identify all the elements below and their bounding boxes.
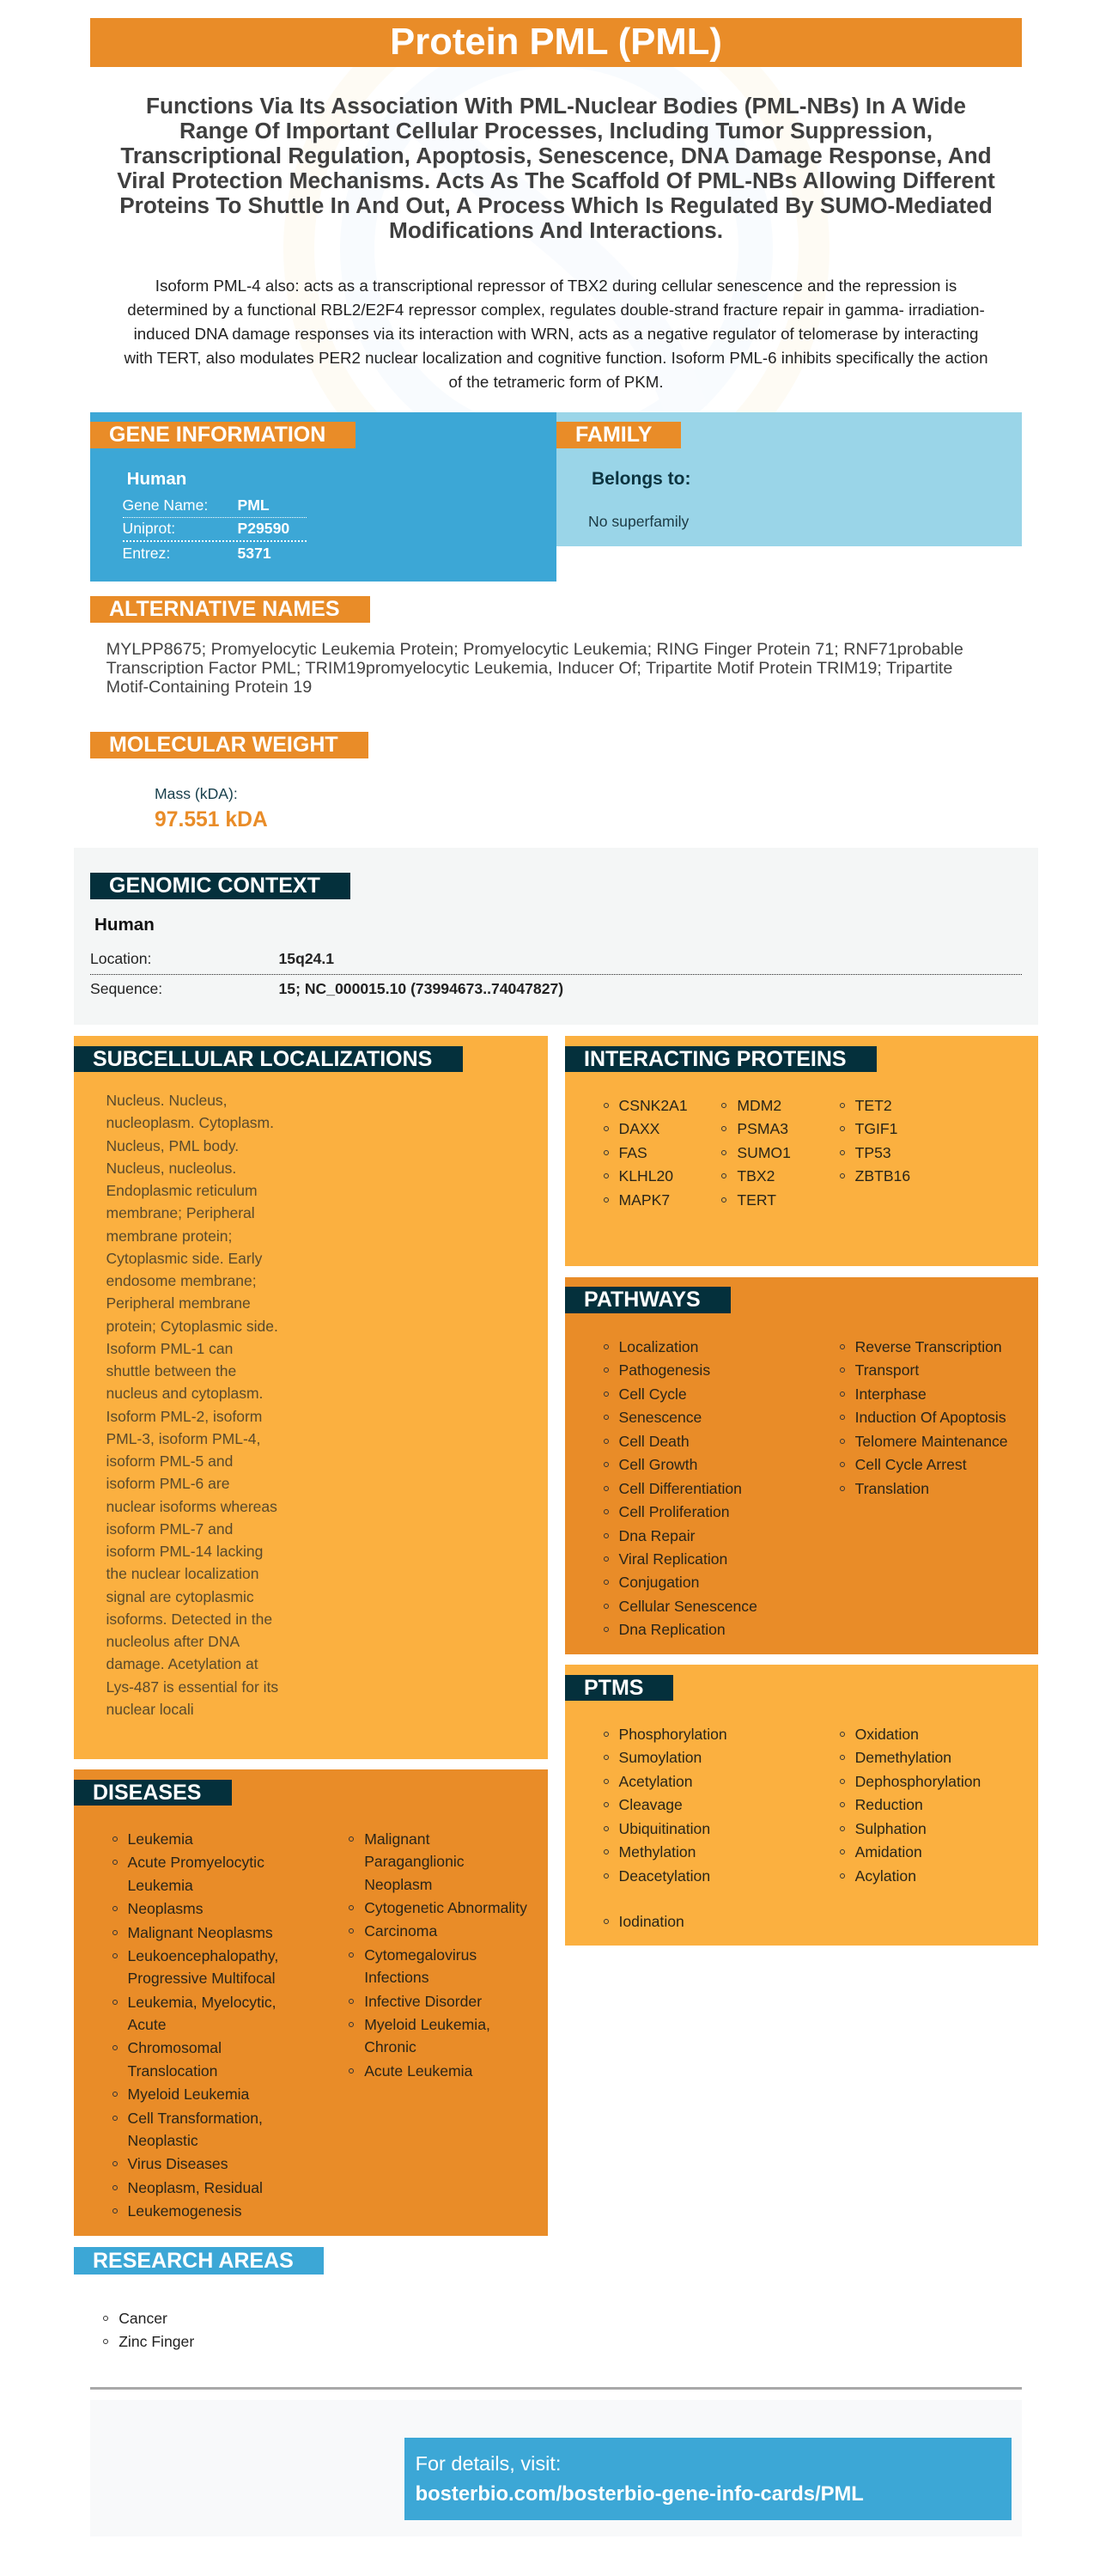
pathway list column 1: Cell Proliferation: [618, 1503, 730, 1520]
localization text: Peripheral membrane: [106, 1294, 251, 1312]
panel: alternative names: [90, 596, 963, 697]
protein list column 1: KLHL20: [618, 1167, 673, 1184]
pathway list column 1: Dna Replication: [618, 1621, 726, 1638]
protein list column 1: MAPK7: [618, 1191, 670, 1209]
localization text: Isoform PML-1 can: [106, 1340, 233, 1357]
protein list column 1: CSNK2A1: [618, 1097, 688, 1114]
sequence row: 15; NC_000015.10 (73994673..74047827): [278, 980, 563, 997]
heading: function summary: Functions Via Its Association With PML-Nuclear Bodies (PML-NBs) In A Wide: [146, 93, 966, 119]
species label: Human: [94, 915, 155, 935]
heading: interacting proteins: INTERACTING PROTEINS: [584, 1047, 847, 1071]
disease list column 2: Acute Leukemia: [364, 2062, 472, 2080]
entrez row: 5371: [237, 545, 271, 562]
PTM list column 2: Oxidation: [855, 1726, 919, 1743]
text block: isoform description: with TERT, also modulates PER2 nuclear localization and cognitive function. Isoform PML-6 inhibits specifically the action: [124, 349, 988, 367]
text block: isoform description: induced DNA damage responses via its interaction with WRN, acts as a negative regulator of telomerase by interacting: [134, 325, 978, 343]
pathway list column 1: [604, 1338, 757, 1638]
protein list column 3: TP53: [855, 1144, 891, 1161]
pathway list column 1: Cell Cycle: [618, 1385, 687, 1403]
pathway list column 2: Translation: [855, 1480, 929, 1497]
title: [90, 18, 1022, 67]
heading: function summary: Viral Protection Mechanisms. Acts As The Scaffold Of PML-NBs Allowing Different: [117, 167, 995, 192]
panel: pathways: [565, 1277, 1038, 1654]
disease list column 2: Paraganglionic: [364, 1853, 465, 1870]
alternative names text: Motif-Containing Protein 19: [106, 678, 312, 697]
localization text: isoform PML-6 are: [106, 1475, 229, 1492]
localization text: isoforms. Detected in the: [106, 1611, 272, 1628]
uniprot row: Uniprot:: [122, 520, 175, 537]
panel: research areas: [74, 2247, 324, 2350]
heading: function summary: Range Of Important Cellular Processes, Including Tumor Suppression,: [179, 117, 933, 143]
PTM list column 1: Deacetylation: [618, 1867, 710, 1885]
disease list column 1: Chromosomal: [127, 2039, 222, 2056]
heading: pathways: [565, 1287, 731, 1313]
pathway list column 2: Telomere Maintenance: [855, 1433, 1008, 1450]
heading: PTMs: PTMS: [584, 1676, 643, 1700]
localization text: Nucleus, PML body.: [106, 1137, 239, 1154]
PTM list column 1: Acetylation: [618, 1773, 693, 1790]
localization text: Cytoplasmic side. Early: [106, 1250, 262, 1267]
PTM list column 2: Sulphation: [855, 1820, 927, 1837]
disease list column 2: Malignant: [364, 1830, 429, 1848]
protein list column 3: TET2: [855, 1097, 892, 1114]
sequence row: Sequence:: [90, 980, 162, 997]
disease list column 1: Neoplastic: [127, 2132, 198, 2149]
disease list column 1: Leukemogenesis: [127, 2202, 242, 2220]
alternative names text: MYLPP8675; Promyelocytic Leukemia Protein; Promyelocytic Leukemia; RING Finger Protein 71; RNF71probable: [106, 640, 963, 659]
protein list column 1: DAXX: [618, 1120, 659, 1137]
pathway list column 1: Dna Repair: [618, 1527, 696, 1544]
heading: function summary: [117, 93, 995, 242]
PTM list column 2: Amidation: [855, 1843, 922, 1860]
heading: function summary: Modifications And Interactions.: [389, 216, 723, 242]
pathway list column 1: Cell Growth: [618, 1456, 697, 1473]
PTM list column 2: [840, 1726, 981, 1885]
location row: 15q24.1: [278, 950, 334, 967]
localization text: Endoplasmic reticulum: [106, 1182, 258, 1199]
heading: molecular weight: MOLECULAR WEIGHT: [109, 733, 338, 757]
PTM list column 1: Methylation: [618, 1843, 696, 1860]
pathway list column 1: Cell Differentiation: [618, 1480, 742, 1497]
protein list column 2: SUMO1: [737, 1144, 791, 1161]
localization text: nucleoplasm. Cytoplasm.: [106, 1114, 274, 1131]
localization text: membrane protein;: [106, 1227, 232, 1244]
mass value: 97.551 kDA: [155, 808, 268, 831]
alternative names text: Transcription Factor PML; TRIM19promyelocytic Leukemia, Inducer Of; Tripartite Motif Protein TRIM19; Tripartite: [106, 659, 952, 678]
PTM list column 2: Demethylation: [855, 1749, 951, 1766]
disease list column 2: Infections: [364, 1969, 429, 1986]
text block: isoform description: Isoform PML-4 also: acts as a transcriptional repressor of TBX2 during cellular senescence and the repression is: [155, 277, 957, 295]
localization text: nuclear isoforms whereas: [106, 1498, 277, 1515]
background watermark logo: [283, 67, 830, 412]
heading: family: FAMILY: [575, 423, 652, 447]
protein list column 3: TGIF1: [855, 1120, 897, 1137]
localization text: protein; Cytoplasmic side.: [106, 1318, 278, 1335]
pathway list column 2: Interphase: [855, 1385, 927, 1403]
PTM list column 1: Cleavage: [618, 1796, 683, 1813]
text block: isoform description: determined by a functional RBL2/E2F4 repressor complex, regulates double-strand fracture repair in gamma- irradiation-: [127, 301, 985, 319]
pathway list column 1: Viral Replication: [618, 1550, 727, 1568]
superfamily value: No superfamily: [588, 513, 689, 530]
PTM list column 2: Dephosphorylation: [855, 1773, 981, 1790]
PTM list column 2: Acylation: [855, 1867, 916, 1885]
protein list column 1: [604, 1097, 688, 1209]
PTM list column 1: Ubiquitination: [618, 1820, 710, 1837]
disease list column 2: Chronic: [364, 2038, 416, 2055]
heading: PTMs: [565, 1675, 673, 1701]
protein list column 3: [840, 1097, 910, 1184]
pathway list column 2: Reverse Transcription: [855, 1338, 1002, 1355]
disease list column 2: Neoplasm: [364, 1876, 432, 1893]
sequence row: [90, 980, 563, 997]
heading: diseases: DISEASES: [93, 1781, 201, 1805]
disease list column 1: Cell Transformation,: [127, 2110, 263, 2127]
entrez row: [122, 545, 271, 562]
heading: function summary: Proteins To Shuttle In And Out, A Process Which Is Regulated By SUMO-Mediated: [119, 192, 993, 218]
pathway list column 1: Cellular Senescence: [618, 1598, 757, 1615]
disease list column 1: Progressive Multifocal: [127, 1970, 276, 1987]
pathway list column 1: Conjugation: [618, 1574, 699, 1591]
disease list column 1: Translocation: [127, 2062, 217, 2080]
disease list column 1: Virus Diseases: [127, 2155, 228, 2172]
pathway list column 1: Localization: [618, 1338, 698, 1355]
panel: interacting proteins: [565, 1036, 1038, 1266]
disease list column 1: Acute Promyelocytic: [127, 1854, 264, 1871]
disease list column 2: Cytomegalovirus: [364, 1946, 477, 1964]
pathway list column 1: Pathogenesis: [618, 1361, 710, 1379]
species label: Human: [127, 469, 186, 489]
belongs to label: Belongs to:: [592, 469, 690, 489]
heading: genomic context: GENOMIC CONTEXT: [109, 874, 320, 898]
localization text: endosome membrane;: [106, 1272, 257, 1289]
localization text: nuclear locali: [106, 1701, 194, 1718]
heading: research areas: RESEARCH AREAS: [93, 2249, 294, 2273]
disease list column 1: [112, 1830, 278, 2220]
uniprot row: [122, 520, 289, 537]
localization text: isoform PML-14 lacking: [106, 1543, 263, 1560]
protein list column 3: ZBTB16: [855, 1167, 910, 1184]
localization text: damage. Acetylation at: [106, 1655, 258, 1672]
entrez row: Entrez:: [122, 545, 170, 562]
disease list column 1: Malignant Neoplasms: [127, 1924, 273, 1941]
panel: footer: [90, 2400, 1022, 2536]
disease list column 1: Leukoencephalopathy,: [127, 1947, 278, 1964]
localization text: [106, 1092, 278, 1718]
localization text: the nuclear localization: [106, 1565, 259, 1582]
protein list column 2: PSMA3: [737, 1120, 788, 1137]
protein list column 1: FAS: [618, 1144, 647, 1161]
gene name row: PML: [237, 496, 270, 514]
panel: family: [556, 412, 1022, 546]
localization text: isoform PML-7 and: [106, 1520, 233, 1538]
panel: PTMs: [565, 1665, 1038, 1946]
disease list column 2: Infective Disorder: [364, 1993, 482, 2010]
protein list column 2: TBX2: [737, 1167, 775, 1184]
localization text: Lys-487 is essential for its: [106, 1678, 278, 1696]
callout: details link: [404, 2438, 1012, 2520]
PTM list column 1: Phosphorylation: [618, 1726, 727, 1743]
panel: molecular weight: [90, 732, 368, 831]
location row: Location:: [90, 950, 151, 967]
localization text: Isoform PML-2, isoform: [106, 1407, 262, 1424]
PTM list column 2: Reduction: [855, 1796, 923, 1813]
localization text: shuttle between the: [106, 1362, 236, 1379]
disease list column 2: Myeloid Leukemia,: [364, 2016, 490, 2033]
pathway list column 2: Cell Cycle Arrest: [855, 1456, 967, 1473]
research area list: Zinc Finger: [118, 2333, 194, 2350]
pathway list column 1: Senescence: [618, 1409, 702, 1426]
disease list column 1: Acute: [127, 2016, 167, 2033]
localization text: membrane; Peripheral: [106, 1204, 255, 1221]
localization text: Nucleus, nucleolus.: [106, 1160, 236, 1177]
heading: diseases: [74, 1780, 232, 1806]
heading: gene information: GENE INFORMATION: [109, 423, 325, 447]
pathway list column 2: [840, 1338, 1008, 1497]
alternative names text: [106, 640, 963, 697]
PTM list column 1: Sumoylation: [618, 1749, 702, 1766]
panel: diseases: [74, 1769, 548, 2236]
disease list column 1: Leukemia: [127, 1877, 193, 1894]
heading: family: [556, 422, 681, 448]
PTM list overflow item: Iodination: [618, 1913, 684, 1930]
text block: isoform description: of the tetrameric form of PKM.: [448, 373, 664, 391]
disease list column 1: Neoplasms: [127, 1900, 204, 1917]
disease list column 1: Myeloid Leukemia: [127, 2086, 249, 2103]
pathway list column 2: Induction Of Apoptosis: [855, 1409, 1006, 1426]
localization text: nucleus and cytoplasm.: [106, 1385, 263, 1402]
disease list column 2: Carcinoma: [364, 1922, 437, 1940]
heading: subcellular localizations: SUBCELLULAR LOCALIZATIONS: [93, 1047, 432, 1071]
pathway list column 2: Transport: [855, 1361, 919, 1379]
panel: gene information: [90, 412, 556, 582]
title: Protein PML (PML): [390, 21, 722, 63]
protein list column 2: [721, 1097, 791, 1209]
gene name row: [122, 496, 270, 514]
localization text: PML-3, isoform PML-4,: [106, 1430, 260, 1447]
text block: isoform description: [124, 277, 988, 391]
heading: function summary: Transcriptional Regulation, Apoptosis, Senescence, DNA Damage Response, And: [120, 143, 992, 168]
heading: pathways: PATHWAYS: [584, 1288, 701, 1312]
disease list column 2: Cytogenetic Abnormality: [364, 1899, 527, 1916]
location row: [90, 950, 334, 967]
protein list column 2: TERT: [737, 1191, 776, 1209]
pathway list column 1: Cell Death: [618, 1433, 690, 1450]
disease list column 1: Neoplasm, Residual: [127, 2179, 263, 2196]
localization text: signal are cytoplasmic: [106, 1587, 254, 1605]
mass label: Mass (kDA):: [155, 785, 238, 802]
disease list column 2: [349, 1830, 527, 2080]
details label: For details, visit:: [416, 2452, 561, 2475]
localization text: nucleolus after DNA: [106, 1633, 240, 1650]
disease list column 1: Leukemia, Myelocytic,: [127, 1994, 276, 2011]
localization text: isoform PML-5 and: [106, 1452, 233, 1470]
panel: subcellular localizations: [74, 1036, 548, 1759]
disease list column 1: Leukemia: [127, 1830, 193, 1848]
uniprot row: P29590: [237, 520, 289, 537]
gene name row: Gene Name:: [122, 496, 208, 514]
panel: genomic context: [74, 848, 1038, 1025]
localization text: Nucleus. Nucleus,: [106, 1092, 228, 1109]
protein list column 2: MDM2: [737, 1097, 781, 1114]
PTM list column 1: [604, 1726, 727, 1885]
details url: bosterbio.com/bosterbio-gene-info-cards/PML: [416, 2482, 864, 2506]
heading: alternative names: ALTERNATIVE NAMES: [109, 597, 340, 621]
research area list: Cancer: [118, 2310, 167, 2327]
research area list: [103, 2310, 194, 2350]
